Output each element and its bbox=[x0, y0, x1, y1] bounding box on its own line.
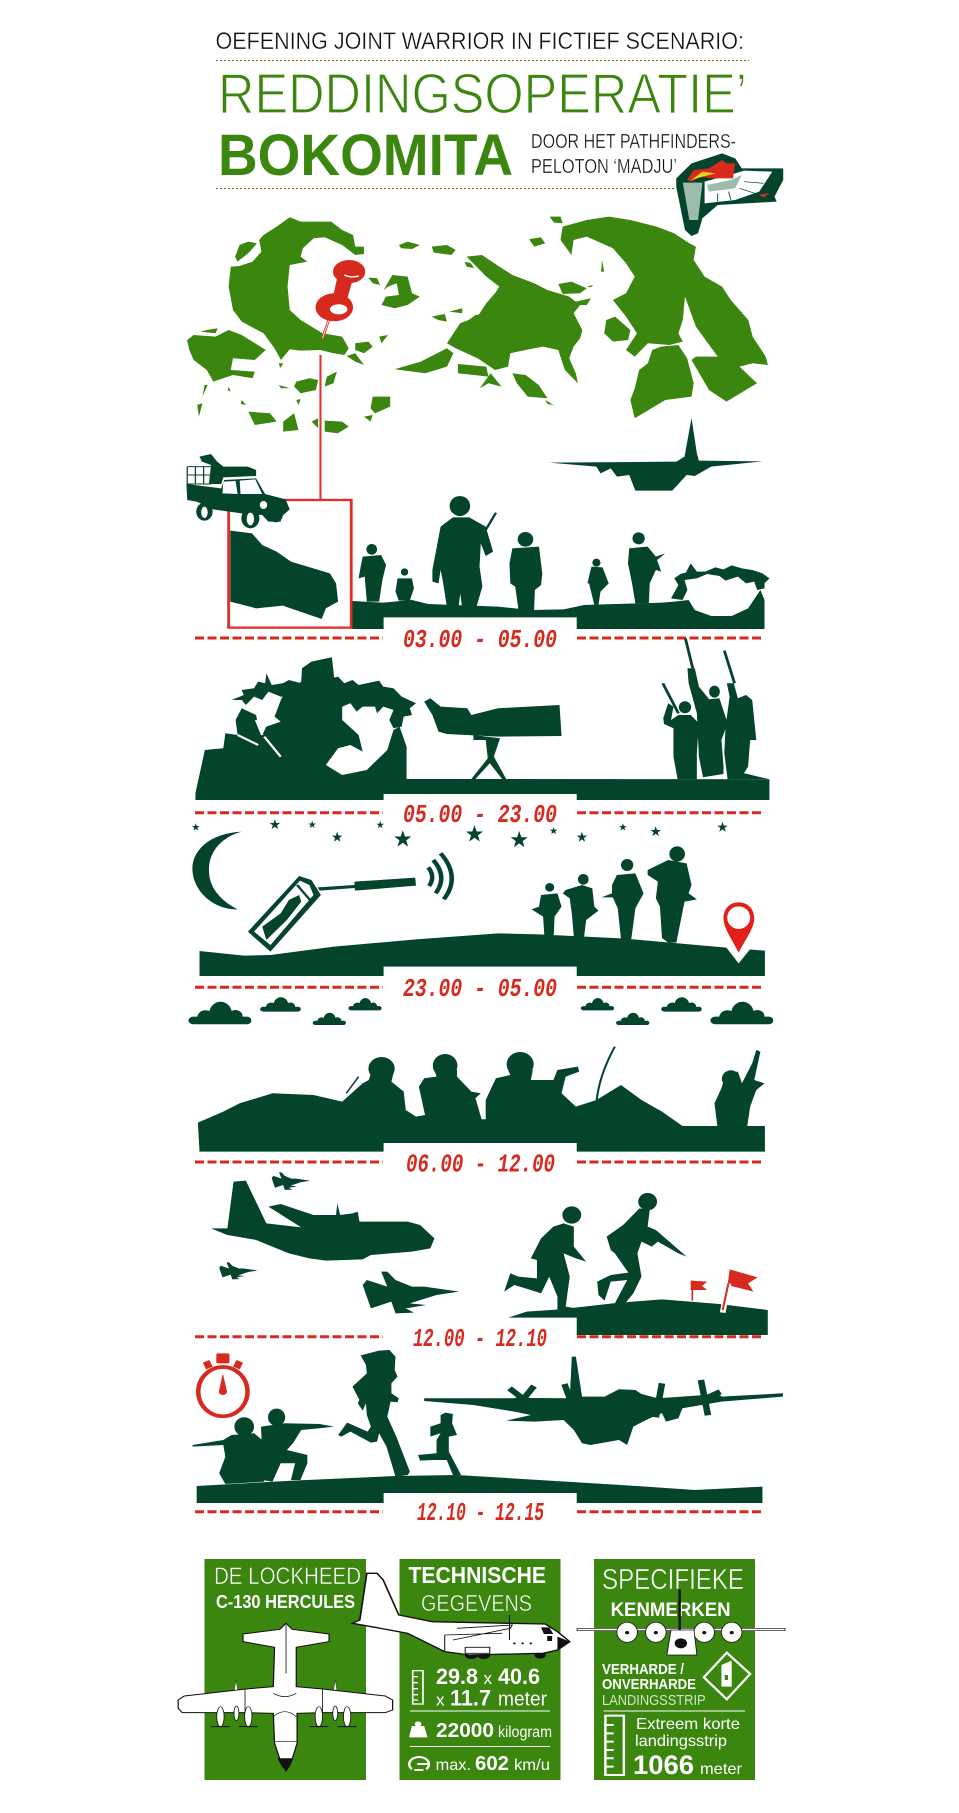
running woman bbox=[338, 1350, 410, 1477]
icon: radio waves bbox=[428, 853, 452, 899]
panel: technische gegevens: max. bbox=[436, 1757, 471, 1774]
panel: De Lockheed C-130 Hercules: DE LOCKHEED bbox=[214, 1563, 361, 1590]
panel: technische gegevens: TECHNISCHE bbox=[408, 1562, 546, 1588]
icon: tall ruler bbox=[605, 1716, 624, 1775]
title: PELOTON ‘MADJU’ bbox=[531, 156, 677, 178]
ground bbox=[197, 1475, 762, 1503]
panel: specifieke kenmerken: Extreem korte bbox=[636, 1716, 740, 1733]
stars bbox=[192, 819, 728, 847]
panel: specifieke kenmerken: meter bbox=[700, 1761, 743, 1778]
title: REDDINGSOPERATIE’ bbox=[218, 62, 747, 126]
panel: De Lockheed C-130 Hercules bbox=[178, 1559, 393, 1780]
panel: technische gegevens: 602 bbox=[475, 1753, 509, 1775]
scene 3: 23.00 - 05.00 bbox=[192, 832, 765, 976]
panel: technische gegevens: km/u bbox=[514, 1757, 550, 1774]
C-130 front silhouette bbox=[424, 1357, 783, 1445]
panel: technische gegevens: meter bbox=[498, 1688, 547, 1710]
plane from behind bbox=[549, 418, 762, 491]
panel: technische gegevens: kilogram bbox=[498, 1724, 552, 1741]
panel: technische gegevens: 11.7 bbox=[450, 1686, 491, 1710]
panel: specifieke kenmerken: landingsstrip bbox=[635, 1733, 727, 1750]
icon: red location marker bbox=[724, 902, 754, 963]
panel: specifieke kenmerken: ONVERHARDE bbox=[602, 1676, 696, 1693]
time divider 05.00 - 23.00: 05.00 - 23.00 bbox=[403, 800, 557, 830]
panel: technische gegevens: x bbox=[436, 1690, 445, 1710]
title: OEFENING JOINT WARRIOR IN FICTIEF SCENARIO: bbox=[216, 28, 744, 55]
icon: speedometer bbox=[409, 1757, 429, 1770]
icon: red map pin bbox=[316, 260, 365, 338]
scene 4: 06.00 - 12.00 hills and soldiers in cover bbox=[198, 1047, 765, 1152]
panel: technische gegevens bbox=[352, 1559, 570, 1780]
icon: ruler bbox=[413, 1671, 423, 1704]
panel: technische gegevens: 40.6 bbox=[498, 1664, 540, 1689]
icon: crescent moon bbox=[192, 832, 242, 909]
panel: De Lockheed C-130 Hercules: C-130 HERCULES bbox=[216, 1592, 355, 1612]
panel: specifieke kenmerken: LANDINGSSTRIP bbox=[602, 1692, 706, 1709]
clouds bbox=[188, 997, 773, 1025]
scene 5: 12.00 - 12.10 bbox=[211, 1172, 768, 1335]
top view plane bbox=[178, 1623, 393, 1771]
title: BOKOMITA bbox=[218, 123, 513, 188]
front view plane bbox=[577, 1589, 785, 1655]
icon: spotting scope bbox=[424, 698, 562, 779]
scene 6: 12.10 - 12.15 bbox=[193, 1350, 783, 1503]
kneeling soldiers bbox=[193, 1409, 334, 1484]
title: DOOR HET PATHFINDERS- bbox=[531, 131, 736, 153]
panel: specifieke kenmerken bbox=[577, 1559, 785, 1780]
panel: technische gegevens: 29.8 bbox=[436, 1664, 478, 1689]
cracks in rock and gap beside soldier bbox=[238, 695, 283, 757]
scene 1: 03.00 - 05.00 bbox=[186, 355, 769, 629]
red flags bbox=[691, 1269, 758, 1313]
time divider 12.00 - 12.10: 12.00 - 12.10 bbox=[413, 1324, 547, 1354]
icon: landing strip diamond bbox=[704, 1653, 750, 1699]
icon: satellite phone bbox=[248, 876, 416, 952]
panel: technische gegevens: GEGEVENS bbox=[421, 1590, 532, 1616]
panel: specifieke kenmerken: KENMERKEN bbox=[611, 1600, 731, 1621]
side view plane bbox=[352, 1573, 570, 1659]
icon: weight bbox=[409, 1721, 427, 1737]
time divider 12.10 - 12.15: 12.10 - 12.15 bbox=[417, 1498, 544, 1528]
icon: jeep with gunner bbox=[186, 454, 290, 528]
time divider 06.00 - 12.00: 06.00 - 12.00 bbox=[406, 1150, 555, 1180]
hill with camouflaged soldier bbox=[195, 657, 769, 800]
soldiers on patrol bbox=[359, 496, 665, 611]
fighter jets bbox=[219, 1172, 459, 1313]
running child bbox=[418, 1413, 461, 1475]
icon: stopwatch bbox=[198, 1353, 247, 1416]
C-130 side silhouette bbox=[211, 1181, 434, 1261]
panel: specifieke kenmerken: VERHARDE / bbox=[602, 1661, 685, 1678]
title bbox=[216, 28, 749, 188]
ground with bush mound bbox=[352, 590, 764, 629]
bush foliage bbox=[671, 563, 769, 600]
four soldiers marching bbox=[532, 846, 697, 943]
red connector and inset box bbox=[229, 355, 351, 628]
panel: specifieke kenmerken: SPECIFIEKE bbox=[602, 1564, 744, 1596]
armed fighters raising rifles bbox=[663, 638, 769, 779]
panel: specifieke kenmerken: 1066 bbox=[633, 1750, 694, 1780]
foliage bbox=[232, 673, 416, 728]
scene 2: 05.00 - 23.00 bbox=[195, 638, 769, 800]
time divider 23.00 - 05.00: 23.00 - 05.00 bbox=[403, 974, 557, 1004]
panel: technische gegevens: x bbox=[484, 1669, 492, 1688]
running soldiers bbox=[504, 1193, 687, 1310]
ground bbox=[508, 1299, 768, 1335]
map of islands bbox=[187, 217, 768, 433]
ground bbox=[200, 933, 765, 976]
time divider 03.00 - 05.00: 03.00 - 05.00 bbox=[403, 625, 557, 655]
icon: pathfinders badge bbox=[676, 153, 783, 236]
panel: technische gegevens: 22000 bbox=[436, 1720, 494, 1742]
